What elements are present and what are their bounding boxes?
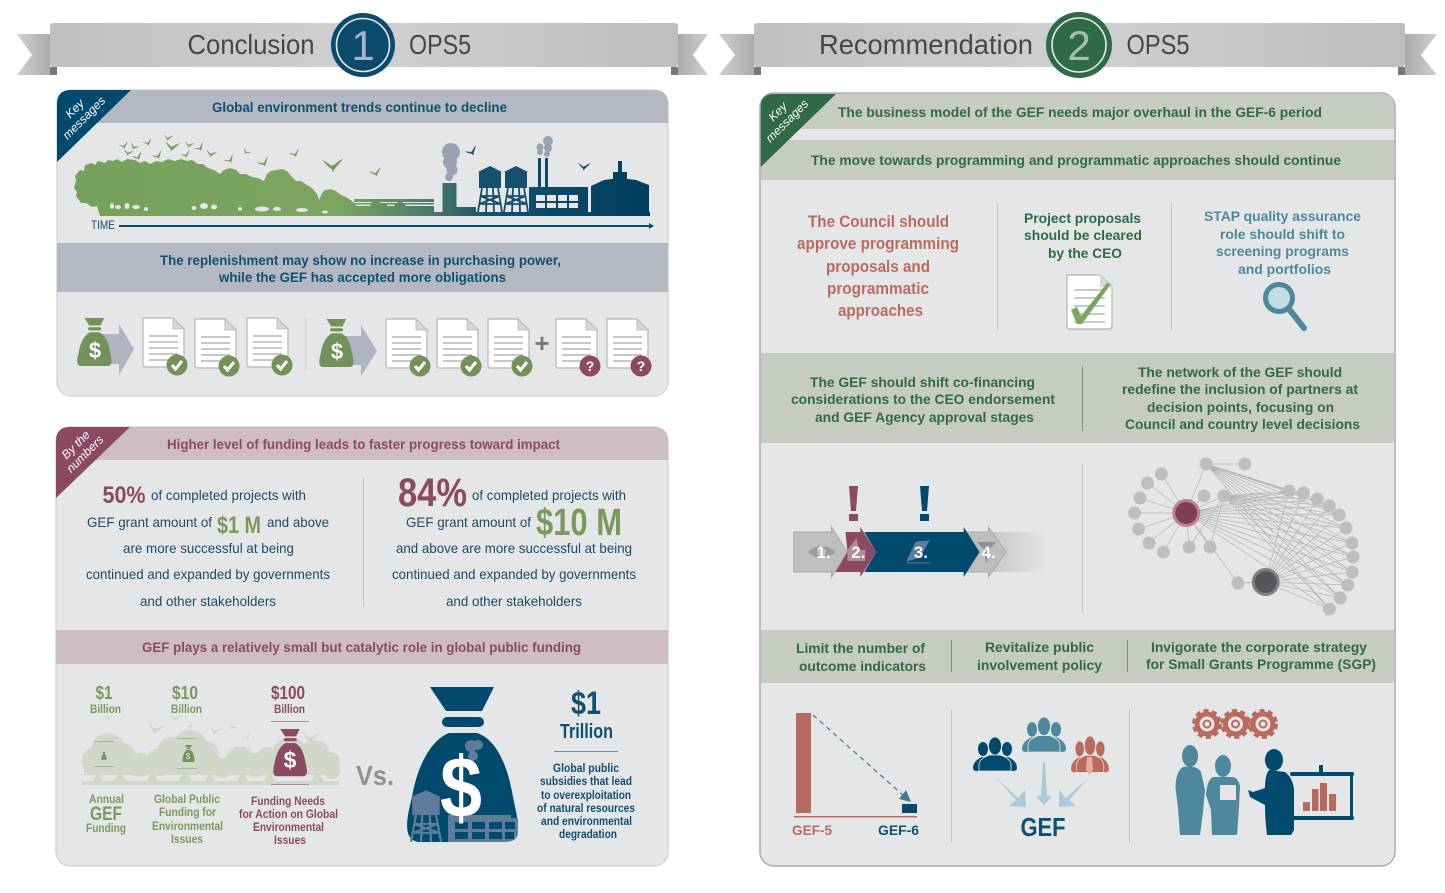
plus sign: + [534, 328, 550, 358]
band: replenishment: while the GEF has accepted more obligations [218, 269, 506, 285]
documents uncertain: ? [586, 358, 594, 374]
band: cofinancing and network [761, 353, 1394, 443]
documents uncertain [556, 319, 652, 376]
documents funded [143, 318, 292, 376]
band: three actions: Revitalize public [985, 639, 1094, 655]
bubble: 10 billion global public funding: Billion [171, 702, 202, 716]
network diagram [1128, 458, 1360, 616]
text: project proposals: Project proposals [1024, 210, 1141, 226]
documents uncertain: ? [637, 358, 645, 374]
number badge 2: 2 [1067, 22, 1091, 69]
illustration: landscape from trees to factories [74, 158, 650, 216]
bubble: 10 billion global public funding: $ [186, 752, 191, 761]
band: cofinancing and network: and GEF Agency approval stages [815, 409, 1034, 425]
bubble: 100 billion funding needs: $100 [271, 683, 305, 703]
process arrows [794, 527, 1048, 577]
trunks gaps [110, 203, 328, 214]
statistic: 84 percent: 84% [398, 471, 467, 515]
money bag and arrow 2 [319, 319, 377, 376]
bubble: 100 billion funding needs: $ [284, 747, 297, 773]
chart: GEF-5 vs GEF-6 indicators: GEF-5 [792, 822, 832, 838]
panel: recommendation key messages [753, 87, 1395, 866]
background pale trees [82, 712, 340, 785]
ribbon title: Recommendation: Recommendation [819, 29, 1033, 60]
icon: groups feeding GEF: GEF [1020, 812, 1066, 842]
text: project proposals: should be cleared [1024, 227, 1142, 243]
statistic: 50 percent: and other stakeholders [140, 593, 276, 609]
corner tag: by the numbers: numbers [63, 432, 106, 475]
statistic: 84 percent: $10 M [536, 502, 622, 544]
icon: people with presentation board [1176, 745, 1354, 835]
bubble: 10 billion global public funding: $10 [172, 683, 198, 703]
text: project proposals: by the CEO [1048, 245, 1122, 261]
band: cofinancing and network: considerations to the CEO endorsement [791, 391, 1055, 407]
corner tag: key messages [753, 87, 836, 167]
step icons [808, 538, 996, 563]
text: council approve: approaches [838, 301, 923, 320]
trillion caption: Trillion [560, 721, 613, 743]
statistic: 84 percent: and above are more successful at being [396, 540, 632, 556]
heading: environment trends: Global environment trends continue to decline [212, 99, 507, 115]
band: cofinancing and network: redefine the inclusion of partners at [1122, 381, 1358, 397]
band: three actions: Invigorate the corporate strategy [1151, 639, 1367, 655]
panel: by the numbers [54, 423, 668, 866]
statistic: 84 percent: continued and expanded by governments [392, 566, 636, 582]
time axis arrow [91, 218, 654, 232]
money bag and arrow 2: $ [331, 339, 343, 364]
band: three actions [761, 630, 1394, 683]
icon: gears [1194, 711, 1276, 737]
number badge 1 [331, 13, 395, 77]
time axis arrow: TIME [91, 218, 115, 232]
bubble: 100 billion funding needs: Environmental [253, 820, 324, 834]
text: STAP quality: screening programs [1216, 243, 1349, 259]
process arrows: 2. [851, 543, 865, 562]
statistic: 84 percent: GEF grant amount of [406, 514, 531, 530]
exclamation marks [849, 486, 929, 521]
statistic: 50 percent: are more successful at being [123, 540, 294, 556]
band: cofinancing and network: decision points, focusing on [1147, 399, 1334, 415]
corner tag: key messages: messages [60, 94, 108, 142]
trillion caption: to overexploitation [541, 788, 631, 802]
trillion caption: degradation [559, 827, 617, 841]
text: STAP quality [1204, 208, 1361, 277]
trillion caption [537, 685, 635, 841]
bubble: 10 billion global public funding: Issues [171, 832, 203, 846]
statistic: 50 percent: 50% [102, 482, 146, 509]
band: cofinancing and network: The network of the GEF should [1138, 364, 1342, 380]
statistic: 50 percent: and above [267, 514, 329, 530]
bubble: 100 billion funding needs: for Action on Global [239, 807, 338, 821]
trillion caption: of natural resources [537, 801, 635, 815]
bubble: 1 billion annual GEF funding: $1 [96, 683, 112, 703]
panel: key messages conclusion [50, 84, 668, 396]
heading: programming approaches: The move towards programming and programmatic approaches should continue [811, 152, 1341, 168]
statistic: 84 percent: and other stakeholders [446, 593, 582, 609]
statistic: 84 percent [392, 471, 636, 609]
band: cofinancing and network: The GEF should shift co-financing [810, 374, 1035, 390]
statistic: 50 percent: of completed projects with [151, 487, 306, 503]
text: council approve [797, 212, 959, 320]
icon: magnifying glass [1266, 284, 1304, 328]
band: cofinancing and network: Council and country level decisions [1125, 416, 1360, 432]
big money bag: $ [440, 740, 482, 836]
bubble: 100 billion funding needs [239, 683, 338, 847]
text: council approve: programmatic [827, 279, 929, 298]
bubble: 1 billion annual GEF funding: Annual [89, 792, 124, 806]
versus label: Vs. [356, 760, 394, 791]
bubble: 1 billion annual GEF funding [86, 683, 126, 835]
bubble: 100 billion funding needs: Funding Needs [251, 794, 325, 808]
bubble: 10 billion global public funding: Funding for [159, 805, 216, 819]
text: council approve: approve programming [797, 234, 959, 253]
bubble: 100 billion funding needs: Issues [274, 833, 306, 847]
icon: checked document [1067, 275, 1112, 329]
ribbon: Conclusion OPS5 [17, 13, 708, 77]
icon: groups feeding GEF [973, 717, 1109, 842]
process arrows: 4. [981, 543, 996, 562]
ribbon title: Conclusion: Conclusion [188, 29, 314, 60]
statistic: 84 percent: of completed projects with [472, 487, 626, 503]
corner tag: key messages [50, 84, 131, 162]
trillion caption: Global public [553, 761, 619, 775]
corner tag: key messages: Key [765, 99, 791, 124]
documents required [386, 319, 532, 376]
birds [118, 134, 591, 178]
heading: funding level: Higher level of funding leads to faster progress toward impact [167, 436, 560, 452]
text: STAP quality: and portfolios [1238, 261, 1331, 277]
band: three actions: involvement policy [977, 657, 1102, 673]
band: three actions: Limit the number of [796, 640, 925, 656]
text: STAP quality: STAP quality assurance [1204, 208, 1361, 224]
bubble: 1 billion annual GEF funding: GEF [90, 804, 122, 825]
ribbon title: OPS5: OPS5 [409, 29, 471, 60]
chart: GEF-5 vs GEF-6 indicators [792, 713, 919, 838]
band: replenishment: The replenishment may show no increase in purchasing power, [160, 252, 561, 268]
statistic: 50 percent: GEF grant amount of [87, 514, 212, 530]
number badge 2 [1046, 12, 1112, 78]
statistic: 50 percent: $1 M [217, 512, 261, 539]
money bag and arrow 1: $ [89, 338, 101, 363]
bubble: 10 billion global public funding: Global Public [154, 792, 220, 806]
process arrows: 1. [817, 543, 831, 562]
number badge 1: 1 [351, 22, 375, 69]
trillion caption: and environmental [541, 814, 632, 828]
band: replenishment [57, 243, 668, 292]
statistic: 50 percent: continued and expanded by governments [86, 566, 330, 582]
trillion caption: $1 [571, 685, 601, 721]
bubble: 1 billion annual GEF funding: Billion [90, 702, 121, 716]
process arrows: 3. [914, 543, 928, 562]
corner tag: key messages: Key [62, 96, 88, 121]
ribbon: Recommendation OPS5 [719, 12, 1437, 78]
corner tag: by the numbers [54, 423, 130, 498]
big money bag [407, 687, 518, 842]
corner tag: by the numbers: By the [59, 428, 93, 462]
trillion caption: subsidies that lead [540, 774, 632, 788]
bubble: 1 billion annual GEF funding: Funding [86, 821, 126, 835]
band: catalytic role: GEF plays a relatively small but catalytic role in global public funding [142, 639, 581, 655]
band: catalytic role [56, 630, 668, 664]
text: STAP quality: role should shift to [1220, 226, 1345, 242]
band: three actions: outcome indicators [799, 658, 926, 674]
statistic: 50 percent [86, 482, 330, 609]
text: project proposals [1024, 210, 1142, 261]
chart: GEF-5 vs GEF-6 indicators: GEF-6 [878, 822, 919, 838]
ribbon title: OPS5 right: OPS5 [1126, 29, 1190, 60]
money bag and arrow 1 [77, 318, 134, 375]
text: council approve: The Council should [808, 212, 949, 231]
bubble: 100 billion funding needs: Billion [274, 702, 305, 716]
text: council approve: proposals and [826, 257, 930, 276]
bubble: 10 billion global public funding: Environmental [152, 819, 223, 833]
factory windows and smoke [442, 136, 578, 212]
corner tag: key messages: messages [763, 97, 811, 145]
heading: business model: The business model of the GEF needs major overhaul in the GEF-6 period [838, 104, 1322, 120]
bubble: 10 billion global public funding [152, 683, 223, 846]
band: three actions: for Small Grants Programme (SGP) [1146, 656, 1376, 672]
